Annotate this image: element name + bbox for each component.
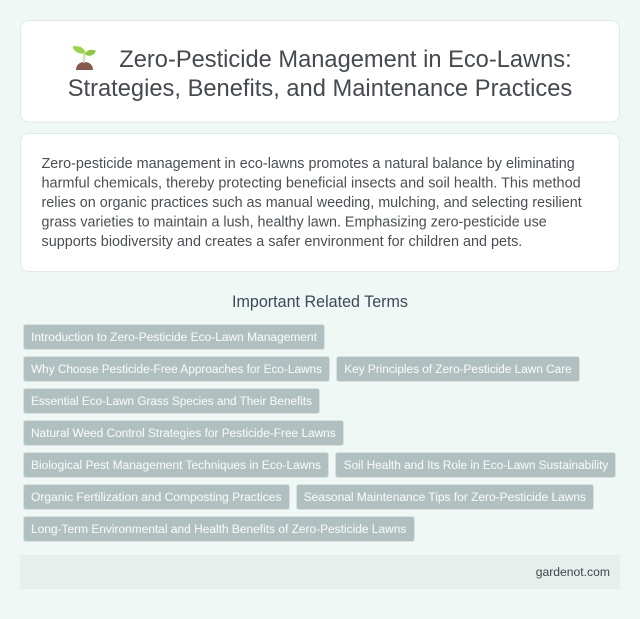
text block: introduction paragraph: grass varieties to maintain a lush, healthy lawn. Emphasizing zero-pesticide use [42,214,547,230]
title [68,46,572,102]
heading: important related terms: Important Related Terms [232,293,408,311]
tag: key principles [336,356,580,382]
title: Strategies, Benefits, and Maintenance Practices [68,75,572,102]
tag: organic fertilization: Organic Fertilization and Composting Practices [31,490,282,504]
tag: long-term benefits: Long-Term Environmental and Health Benefits of Zero-Pesticide Lawns [31,522,406,536]
tag: soil health [336,452,616,478]
title: Zero-Pesticide Management in Eco-Lawns: [119,46,572,73]
panel: title card [20,20,620,122]
panel: introduction [20,134,620,272]
text block: introduction paragraph: harmful chemicals, thereby protecting beneficial insects and soil health. This method [42,176,581,192]
text block: introduction paragraph [42,156,582,250]
tag: seasonal maintenance: Seasonal Maintenance Tips for Zero-Pesticide Lawns [304,490,586,504]
footer source text: gardenot.com [536,565,610,579]
tag: biological pest management: Biological Pest Management Techniques in Eco-Lawns [31,458,321,472]
tag: introduction [24,324,324,350]
tag: organic fertilization [24,484,290,510]
tag: key principles: Key Principles of Zero-Pesticide Lawn Care [344,362,572,376]
footer bar [20,555,620,589]
tag: introduction: Introduction to Zero-Pesticide Eco-Lawn Management [31,330,318,344]
tag list [24,324,616,542]
tag: grass species: Essential Eco-Lawn Grass Species and Their Benefits [31,394,312,408]
text block: introduction paragraph: Zero-pesticide management in eco-lawns promotes a natural balance by eliminating [42,156,575,172]
icon: seedling [72,46,96,70]
tag: why choose [24,356,330,382]
tag: grass species [24,388,320,414]
text block: introduction paragraph: supports biodiversity and creates a safer environment for children and pets. [42,234,522,250]
tag: seasonal maintenance [296,484,594,510]
tag: weed control [24,420,344,446]
tag: biological pest management [24,452,328,478]
tag: weed control: Natural Weed Control Strategies for Pesticide-Free Lawns [31,426,336,440]
tag: soil health: Soil Health and Its Role in Eco-Lawn Sustainability [344,458,609,472]
tag: long-term benefits [24,516,414,542]
tag: why choose: Why Choose Pesticide-Free Approaches for Eco-Lawns [31,362,322,376]
text block: introduction paragraph: relies on organic practices such as manual weeding, mulching, and selecting resilient [42,195,582,211]
